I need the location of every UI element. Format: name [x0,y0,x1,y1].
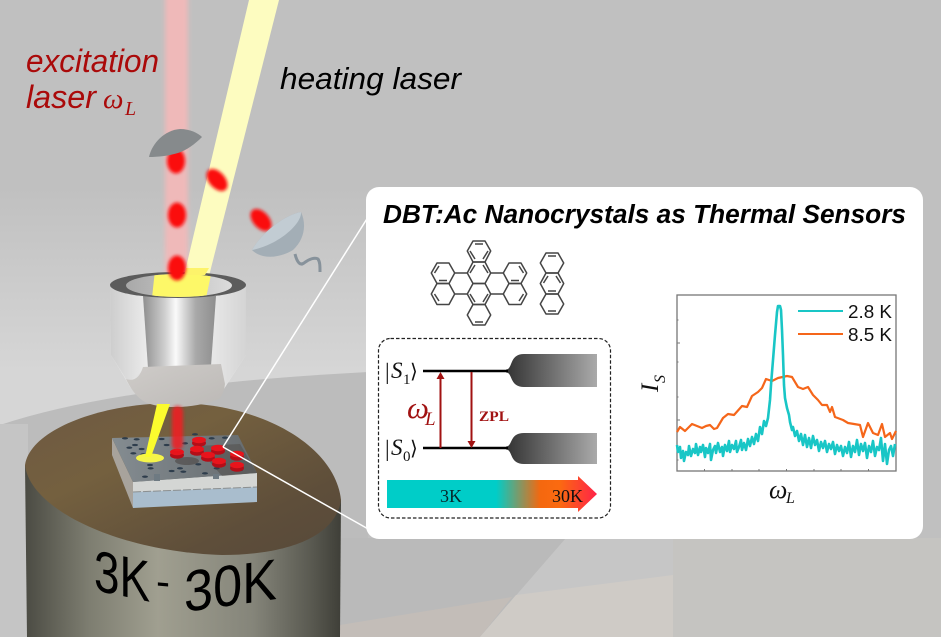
label: excitation laser: L [124,98,136,120]
label: temperature range [94,539,277,625]
curve: 2.8 K [677,306,895,464]
label S0: ⟩ [410,438,418,460]
spectrum chart [637,295,896,507]
temperature arrow: 3K [440,486,462,506]
label S0 [385,435,418,465]
label: temperature range: 30K [184,547,277,625]
arrow: excitation [436,372,444,448]
broadened level S1 [506,354,597,387]
molecule: DBT [431,241,527,325]
curve: 8.5 K [677,376,896,439]
label: omega L: ω [407,390,429,425]
arrow: ZPL [468,372,476,448]
temperature arrow: 30K [552,486,583,506]
chip left side [112,438,133,508]
chip top surface [112,435,257,482]
cryostat cylinder [25,403,341,637]
label S1: 1 [403,372,410,388]
legend: 8.5 K [848,325,892,345]
excitation pulses [167,148,276,235]
label: omega L: L [424,409,436,430]
x-axis label: L [785,490,795,507]
label S1: S [391,358,403,383]
y-axis label: I [637,382,664,393]
energy level diagram [378,338,610,518]
label S1 [385,358,418,388]
heating laser beam [184,0,279,276]
broadened level S0 [506,433,597,464]
objective lens [110,268,246,407]
temperature arrow [387,476,597,512]
label: excitation laser: excitation [26,43,159,79]
label: ZPL: ZPL [479,409,509,425]
pulse at objective [168,256,186,280]
excitation beam at sample [172,406,183,450]
heating spot [136,454,164,462]
label: excitation laser: ω [103,83,123,115]
label S0: 0 [403,449,410,465]
x-axis label: ω [769,475,787,504]
chip front side [133,473,257,508]
label: omega L [407,390,436,430]
excitation laser beam [165,0,188,275]
molecule: anthracene [540,253,564,314]
heating beam at sample [145,404,170,457]
x-axis label [769,475,795,507]
label S0: S [391,435,403,460]
label: excitation laser: laser [26,79,97,115]
label S1: ⟩ [410,361,418,383]
chart axes [677,295,896,471]
label: temperature range: 3K [94,539,150,615]
collection optic with fibre [252,212,320,272]
legend: 2.8 K [848,302,892,322]
mirror [149,129,202,157]
label: temperature range: - [156,557,170,605]
sample chip [112,404,257,508]
label: heating laser: heating laser [280,61,463,96]
label S0: | [385,436,390,461]
y-axis label [637,375,669,393]
label: excitation laser [26,43,159,120]
panel heading: DBT:Ac Nanocrystals as Thermal Sensors [383,201,906,229]
red nanocrystals [170,437,244,472]
level lines [423,371,508,448]
label S1: | [385,359,390,384]
y-axis label: S [652,375,669,383]
chip holes [122,433,243,478]
zoom lines [223,214,370,530]
cylinder top [25,403,341,555]
chip contacts [154,474,219,481]
legend [798,302,892,345]
panel: thermal sensors [366,187,923,539]
